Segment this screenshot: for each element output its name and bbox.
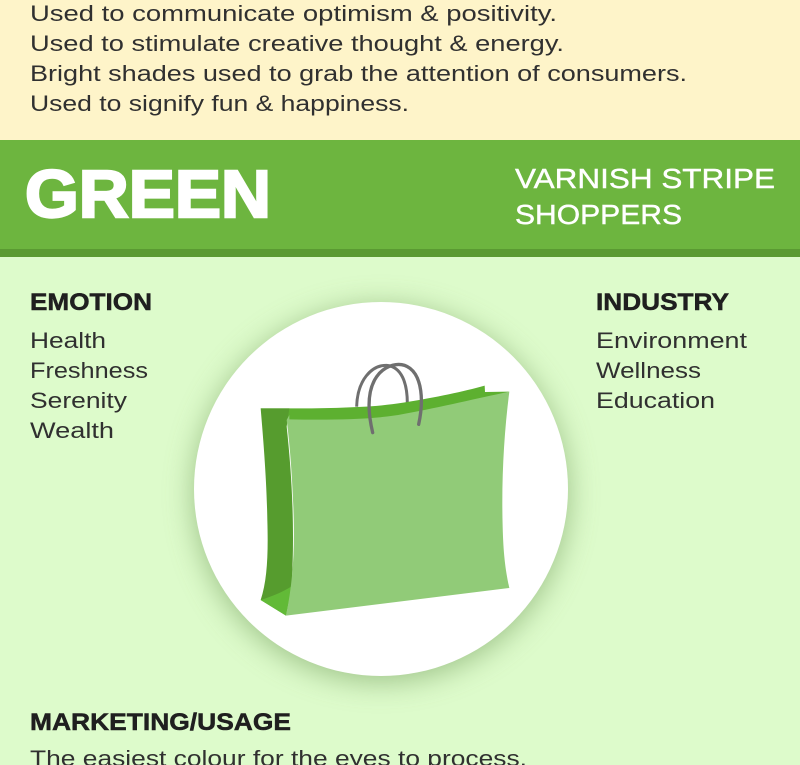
brand name (515, 163, 775, 230)
emotion list: Serenity (30, 388, 127, 413)
front handle (369, 364, 421, 433)
emotion list (30, 289, 152, 443)
heading: green: GREEN (25, 157, 271, 232)
side panel (261, 408, 293, 616)
text block: yellow marketing usage: Used to stimulate creative thought & energy. (30, 31, 564, 56)
industry list: Wellness (596, 358, 701, 383)
text block: yellow marketing usage: Bright shades used to grab the attention of consumers. (30, 61, 687, 86)
circle with shadow (194, 302, 568, 681)
industry list: INDUSTRY (596, 289, 729, 316)
brand name: SHOPPERS (515, 199, 682, 230)
panel: green section body (0, 257, 800, 765)
emotion list: Wealth (30, 418, 114, 443)
emotion list: Health (30, 328, 106, 353)
icon: green shopping bag (261, 364, 509, 616)
industry list (596, 289, 747, 413)
back handle (357, 365, 407, 407)
industry list: Environment (596, 328, 747, 353)
panel: yellow section (0, 0, 800, 140)
front panel (286, 392, 509, 616)
marketing usage (30, 709, 527, 765)
bottom fold (261, 586, 292, 616)
industry list: Education (596, 388, 715, 413)
brand name: VARNISH STRIPE (515, 163, 775, 194)
emotion list: Freshness (30, 358, 148, 383)
text block: yellow marketing usage: Used to signify fun & happiness. (30, 91, 409, 116)
back panel rim (261, 386, 509, 427)
text block: yellow marketing usage (30, 1, 687, 116)
panel: green header band (0, 140, 800, 257)
text block: yellow marketing usage: Used to communicate optimism & positivity. (30, 1, 557, 26)
emotion list: EMOTION (30, 289, 152, 316)
marketing usage: MARKETING/USAGE (30, 709, 291, 736)
